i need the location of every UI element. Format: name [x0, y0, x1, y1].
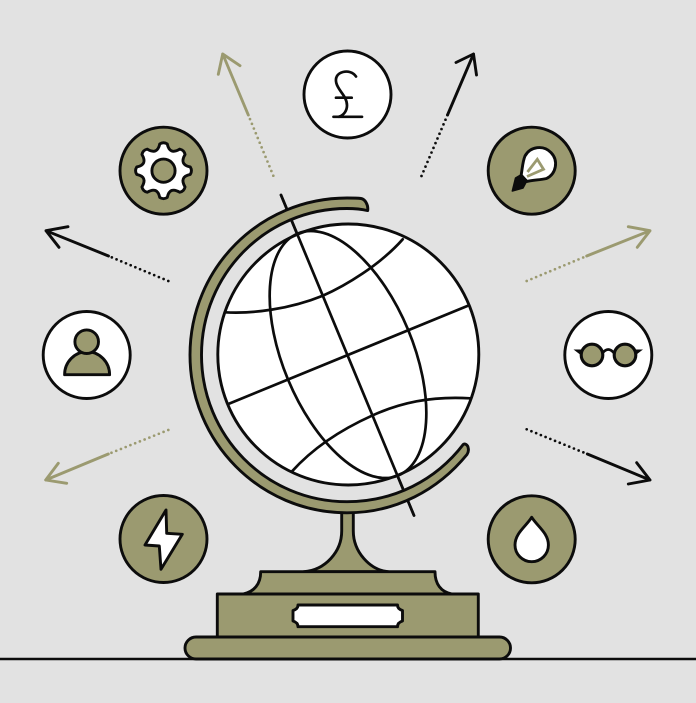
axis rod outside top	[281, 195, 414, 516]
icon: person	[43, 312, 130, 398]
globe sphere	[218, 224, 479, 485]
foot of base	[185, 637, 510, 659]
arrow: lower right, black	[527, 429, 650, 484]
plaque	[293, 605, 402, 627]
arrow: top right, black	[422, 54, 476, 176]
arrow: top left, olive	[218, 54, 273, 176]
arrow: upper left, black	[46, 227, 168, 281]
globe stand base	[185, 510, 510, 659]
icon: water drop	[488, 496, 575, 583]
icon: light bulb	[488, 127, 575, 214]
icon: gear	[120, 127, 207, 214]
arrow: lower left, olive	[46, 430, 168, 483]
globe meridian ring	[190, 198, 468, 513]
upper plinth	[243, 572, 452, 594]
icon: lightning bolt	[120, 496, 207, 582]
floor line	[0, 658, 696, 660]
main plinth block	[217, 594, 478, 637]
globe	[218, 195, 479, 516]
icon: glasses	[565, 312, 652, 398]
arrow: right, olive	[527, 227, 650, 281]
graticule lines	[225, 195, 470, 516]
stand neck	[304, 510, 388, 572]
icon: pound sign	[304, 51, 391, 138]
